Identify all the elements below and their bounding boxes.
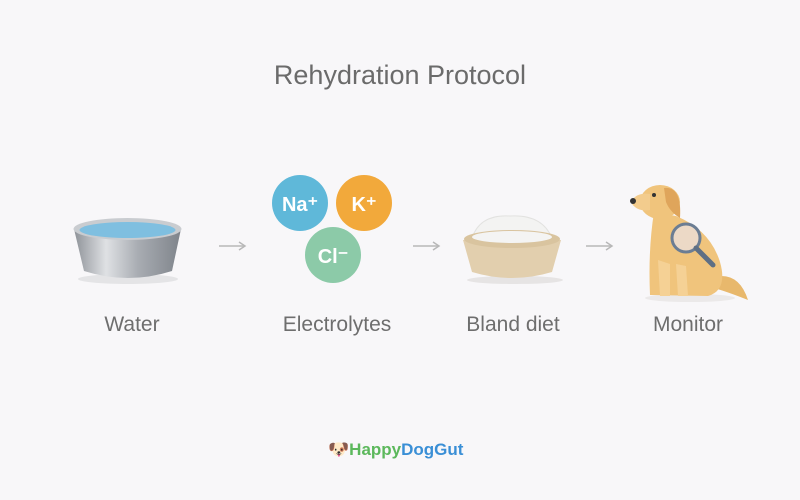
label: monitor: Monitor [653,313,723,336]
arrow 1 [219,242,246,250]
label: electrolytes: Electrolytes [283,313,391,336]
icon: electrolytes [272,175,392,283]
logo: 🐶HappyDogGut [328,440,463,459]
arrow 3 [586,242,614,250]
icon: bland diet bowl [463,216,563,284]
label: water: Water [104,313,160,336]
title: Rehydration Protocol [274,60,526,90]
icon: electrolytes: K⁺ [352,194,376,216]
arrow 2 [413,242,440,250]
icon: electrolytes: Na⁺ [282,194,318,216]
icon: electrolytes: Cl⁻ [318,246,348,268]
label: bland diet: Bland diet [466,313,560,336]
icon: dog with magnifier [630,185,748,302]
icon: water bowl [74,218,182,284]
